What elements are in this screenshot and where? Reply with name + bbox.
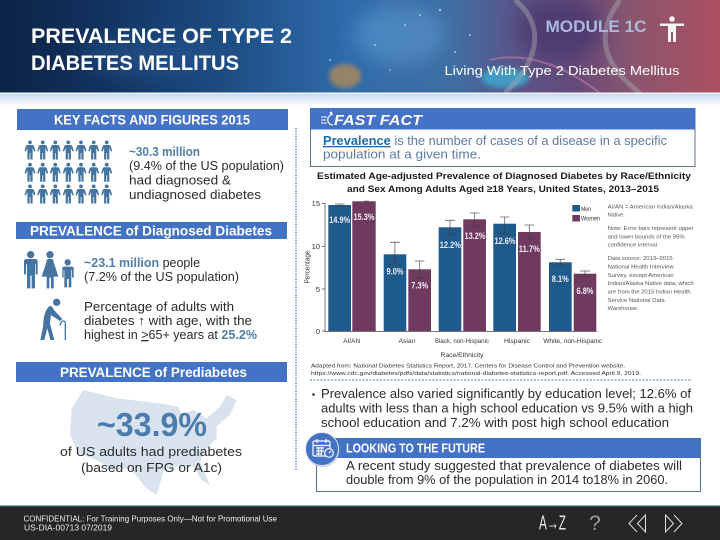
heading: looking to the future: LOOKING TO THE FUTURE — [346, 442, 485, 456]
footer — [0, 506, 720, 540]
chart notes — [608, 204, 694, 312]
header banner — [0, 0, 720, 94]
chart title — [317, 171, 692, 195]
subtitle: Living With Type 2 Diabetes Mellitus — [444, 63, 680, 78]
text: 23.1 million: ~23.1 million people — [84, 255, 200, 270]
chart notes: and lower bounds of the 95% — [608, 234, 685, 240]
chart title: and Sex Among Adults Aged ≥18 Years, United States, 2013–2015 — [347, 184, 660, 195]
chart notes: Service National Data — [608, 298, 666, 304]
chart notes: Data source: 2013–2015 — [608, 256, 673, 262]
heading: fast fact: FAST FACT — [334, 112, 424, 129]
icon: family — [24, 251, 74, 288]
icon: calendar with clock — [306, 432, 340, 467]
heading: key facts: KEY FACTS AND FIGURES 2015 — [54, 112, 250, 128]
y axis — [304, 199, 597, 336]
footer text: confidentiality: US-DIA-00713 07/2019 — [24, 522, 112, 532]
value labels: 9.0% — [386, 267, 404, 277]
value labels: 12.2% — [440, 240, 461, 250]
y axis: 5 — [316, 285, 320, 294]
value labels: 6.8% — [576, 286, 594, 296]
chart title: Estimated Age-adjusted Prevalence of Diagnosed Diabetes by Race/Ethnicity — [317, 171, 692, 182]
value labels: 8.1% — [552, 274, 569, 284]
legend — [572, 205, 600, 222]
chart notes: are from the 2015 Indian Health — [608, 290, 691, 296]
legend: Women — [581, 216, 600, 222]
bars: women — [352, 201, 596, 331]
text: prevalence definition: population at a given time. — [323, 146, 481, 162]
value labels: 15.3% — [354, 212, 374, 222]
icon: human figure — [660, 16, 684, 42]
icon: help question mark: ? — [589, 512, 601, 535]
icon: next arrows — [666, 515, 682, 532]
bullet: education level — [312, 386, 693, 430]
bar chart — [304, 199, 603, 359]
text: future prediction — [346, 458, 682, 487]
module label: MODULE 1C — [546, 18, 647, 36]
chart notes: National Health Interview — [608, 264, 675, 270]
panel: looking to the future — [306, 432, 701, 492]
text: 30.3 million: ~30.3 million — [129, 144, 200, 159]
x axis labels — [343, 338, 603, 359]
value labels: 7.3% — [411, 281, 428, 291]
chart notes: Survey, except American — [608, 273, 674, 279]
value labels: 12.6% — [494, 236, 516, 246]
value labels: 14.9% — [329, 215, 350, 225]
heading: prediabetes: PREVALENCE of Prediabetes — [60, 365, 247, 380]
source citation: https://www.cdc.gov/diabetes/pdfs/data/statistics/national-diabetes-statistics-report.pdf. Accessed April 9, 2019. — [311, 371, 642, 377]
legend: Men — [581, 206, 591, 213]
bullet: education level: Prevalence also varied significantly by education level; 12.6% of — [321, 386, 691, 401]
text: 30.3 million: undiagnosed diabetes — [129, 187, 262, 202]
text: percentage with age — [84, 299, 257, 342]
value labels — [329, 212, 594, 296]
value labels: 11.7% — [519, 244, 540, 254]
text: 30.3 million: had diagnosed & — [129, 172, 231, 188]
chart notes: Indian/Alaska Native data, which — [608, 281, 694, 287]
y axis: 15 — [312, 199, 320, 208]
bullet: education level: school education and 7.2% with post high school education — [321, 415, 669, 430]
icon: rows of people — [24, 140, 112, 204]
y axis: 10 — [312, 242, 320, 251]
source citation: Adapted from: National Diabetes Statistics Report, 2017. Centers for Disease Control and Prevention website. — [311, 364, 626, 370]
text: future prediction: double from 9% of the population in 2014 to18% in 2060. — [346, 472, 668, 487]
text: 30.3 million: (9.4% of the US population) — [129, 158, 284, 173]
heading: key facts — [17, 109, 288, 130]
panel: prevalence of diagnosed diabetes — [16, 222, 287, 342]
heading: prediabetes — [16, 362, 287, 382]
error bars — [335, 201, 590, 278]
chart notes: Native. — [608, 213, 625, 219]
text: future prediction: A recent study suggested that prevalence of diabetes will — [346, 458, 682, 473]
x axis labels: Hispanic — [504, 338, 531, 345]
panel: key facts — [17, 109, 288, 204]
title: DIABETES MELLITUS — [31, 52, 239, 75]
chart notes: AI/AN = American Indian/Alaska — [608, 204, 694, 210]
x axis labels: White, non-Hispanic — [543, 338, 603, 345]
footer text: confidentiality — [24, 514, 277, 532]
heading: diagnosed diabetes: PREVALENCE of Diagnosed Diabetes — [30, 224, 272, 238]
chart notes: Warehouse. — [608, 306, 639, 312]
text: prediabetes description: of US adults had prediabetes — [60, 444, 243, 459]
x axis labels: Asian — [398, 338, 416, 345]
bullet: education level: adults with less than a high school education vs 9.5% with a high — [321, 400, 693, 416]
title: PREVALENCE OF TYPE 2 — [31, 25, 292, 48]
big stat: ~33.9% — [97, 406, 207, 443]
footer text: confidentiality: CONFIDENTIAL: For Training Purposes Only—Not for Promotional Use — [24, 514, 277, 524]
text: percentage with age: diabetes ↑ with age, with the — [84, 313, 252, 328]
text: 30.3 million — [129, 144, 284, 202]
icon: stopwatch speed lines — [321, 112, 333, 125]
chart notes: confidence interval. — [608, 243, 659, 249]
text: prediabetes description — [60, 444, 243, 475]
chart notes: Note: Error bars represent upper — [608, 226, 694, 232]
icon: previous arrows — [629, 515, 646, 532]
icon: glossary A to Z: A→Z — [539, 512, 566, 534]
text: prevalence definition — [323, 133, 667, 162]
text: percentage with age: Percentage of adults with — [84, 299, 234, 314]
title — [31, 25, 292, 75]
light band under header — [0, 94, 720, 106]
text: percentage with age: highest in >65+ years at 25.2% — [84, 327, 257, 342]
icon: elderly person with cane — [40, 299, 65, 340]
y axis: 0 — [316, 327, 320, 336]
value labels: 13.2% — [464, 231, 486, 241]
text: prediabetes description: (based on FPG or A1c) — [81, 460, 222, 475]
panel: prediabetes — [16, 362, 287, 495]
map: United States — [70, 390, 237, 495]
source citation — [311, 364, 642, 377]
x axis labels: Race/Ethnicity — [440, 352, 484, 359]
y axis: Percentage — [304, 250, 312, 284]
x axis labels: Black, non-Hispanic — [435, 338, 490, 345]
text: 23.1 million: (7.2% of the US population) — [84, 269, 239, 284]
text: prevalence definition: Prevalence is the number of cases of a disease in a specific — [323, 133, 667, 148]
bars: men — [328, 205, 572, 331]
text: 23.1 million — [84, 255, 239, 284]
panel: fast fact — [310, 108, 695, 166]
x axis labels: AI/AN — [343, 338, 360, 345]
